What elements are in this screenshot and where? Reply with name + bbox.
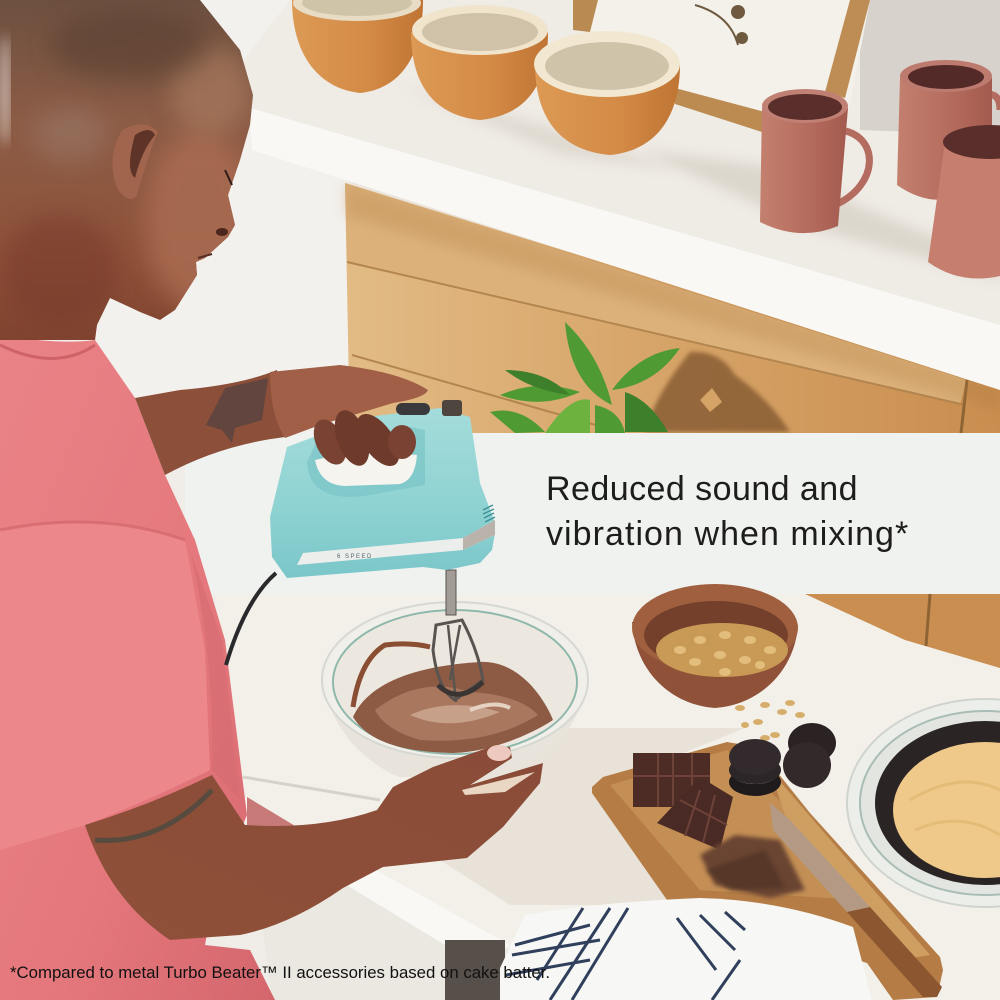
loose peanuts xyxy=(735,700,805,741)
man: forearm with tattoo xyxy=(135,370,285,475)
man: head xyxy=(0,0,260,345)
towel xyxy=(500,898,872,1000)
cutting board xyxy=(592,742,943,1000)
man: body and shirt xyxy=(0,335,275,1000)
hand mixer xyxy=(270,400,495,578)
heading: vibration when mixing* xyxy=(546,515,909,553)
man: lower arm and hand on bowl xyxy=(85,745,543,940)
plant xyxy=(490,322,680,433)
mixer cord xyxy=(226,573,276,665)
counter xyxy=(215,594,1000,1000)
pie dish xyxy=(847,699,1000,907)
info band xyxy=(185,433,1000,594)
heading xyxy=(546,470,909,553)
glass mixing bowl with chocolate batter xyxy=(322,602,588,777)
chocolate and cookies xyxy=(633,723,836,898)
mixer label: 6 SPEED xyxy=(337,554,373,560)
terracotta mugs xyxy=(760,60,1000,279)
man: hand on mixer xyxy=(270,365,428,473)
footnote: *Compared to metal Turbo Beater™ II accessories based on cake batter. xyxy=(10,963,550,982)
heading: Reduced sound and xyxy=(546,470,858,508)
mixer beaters xyxy=(433,570,483,702)
wood panel wall xyxy=(345,183,1000,440)
knife xyxy=(770,803,942,997)
picture frame xyxy=(573,0,870,132)
shelf xyxy=(244,0,1000,390)
background wall xyxy=(0,0,1000,440)
peanut bowl xyxy=(632,584,798,708)
ceramic bowls on shelf xyxy=(292,0,680,155)
